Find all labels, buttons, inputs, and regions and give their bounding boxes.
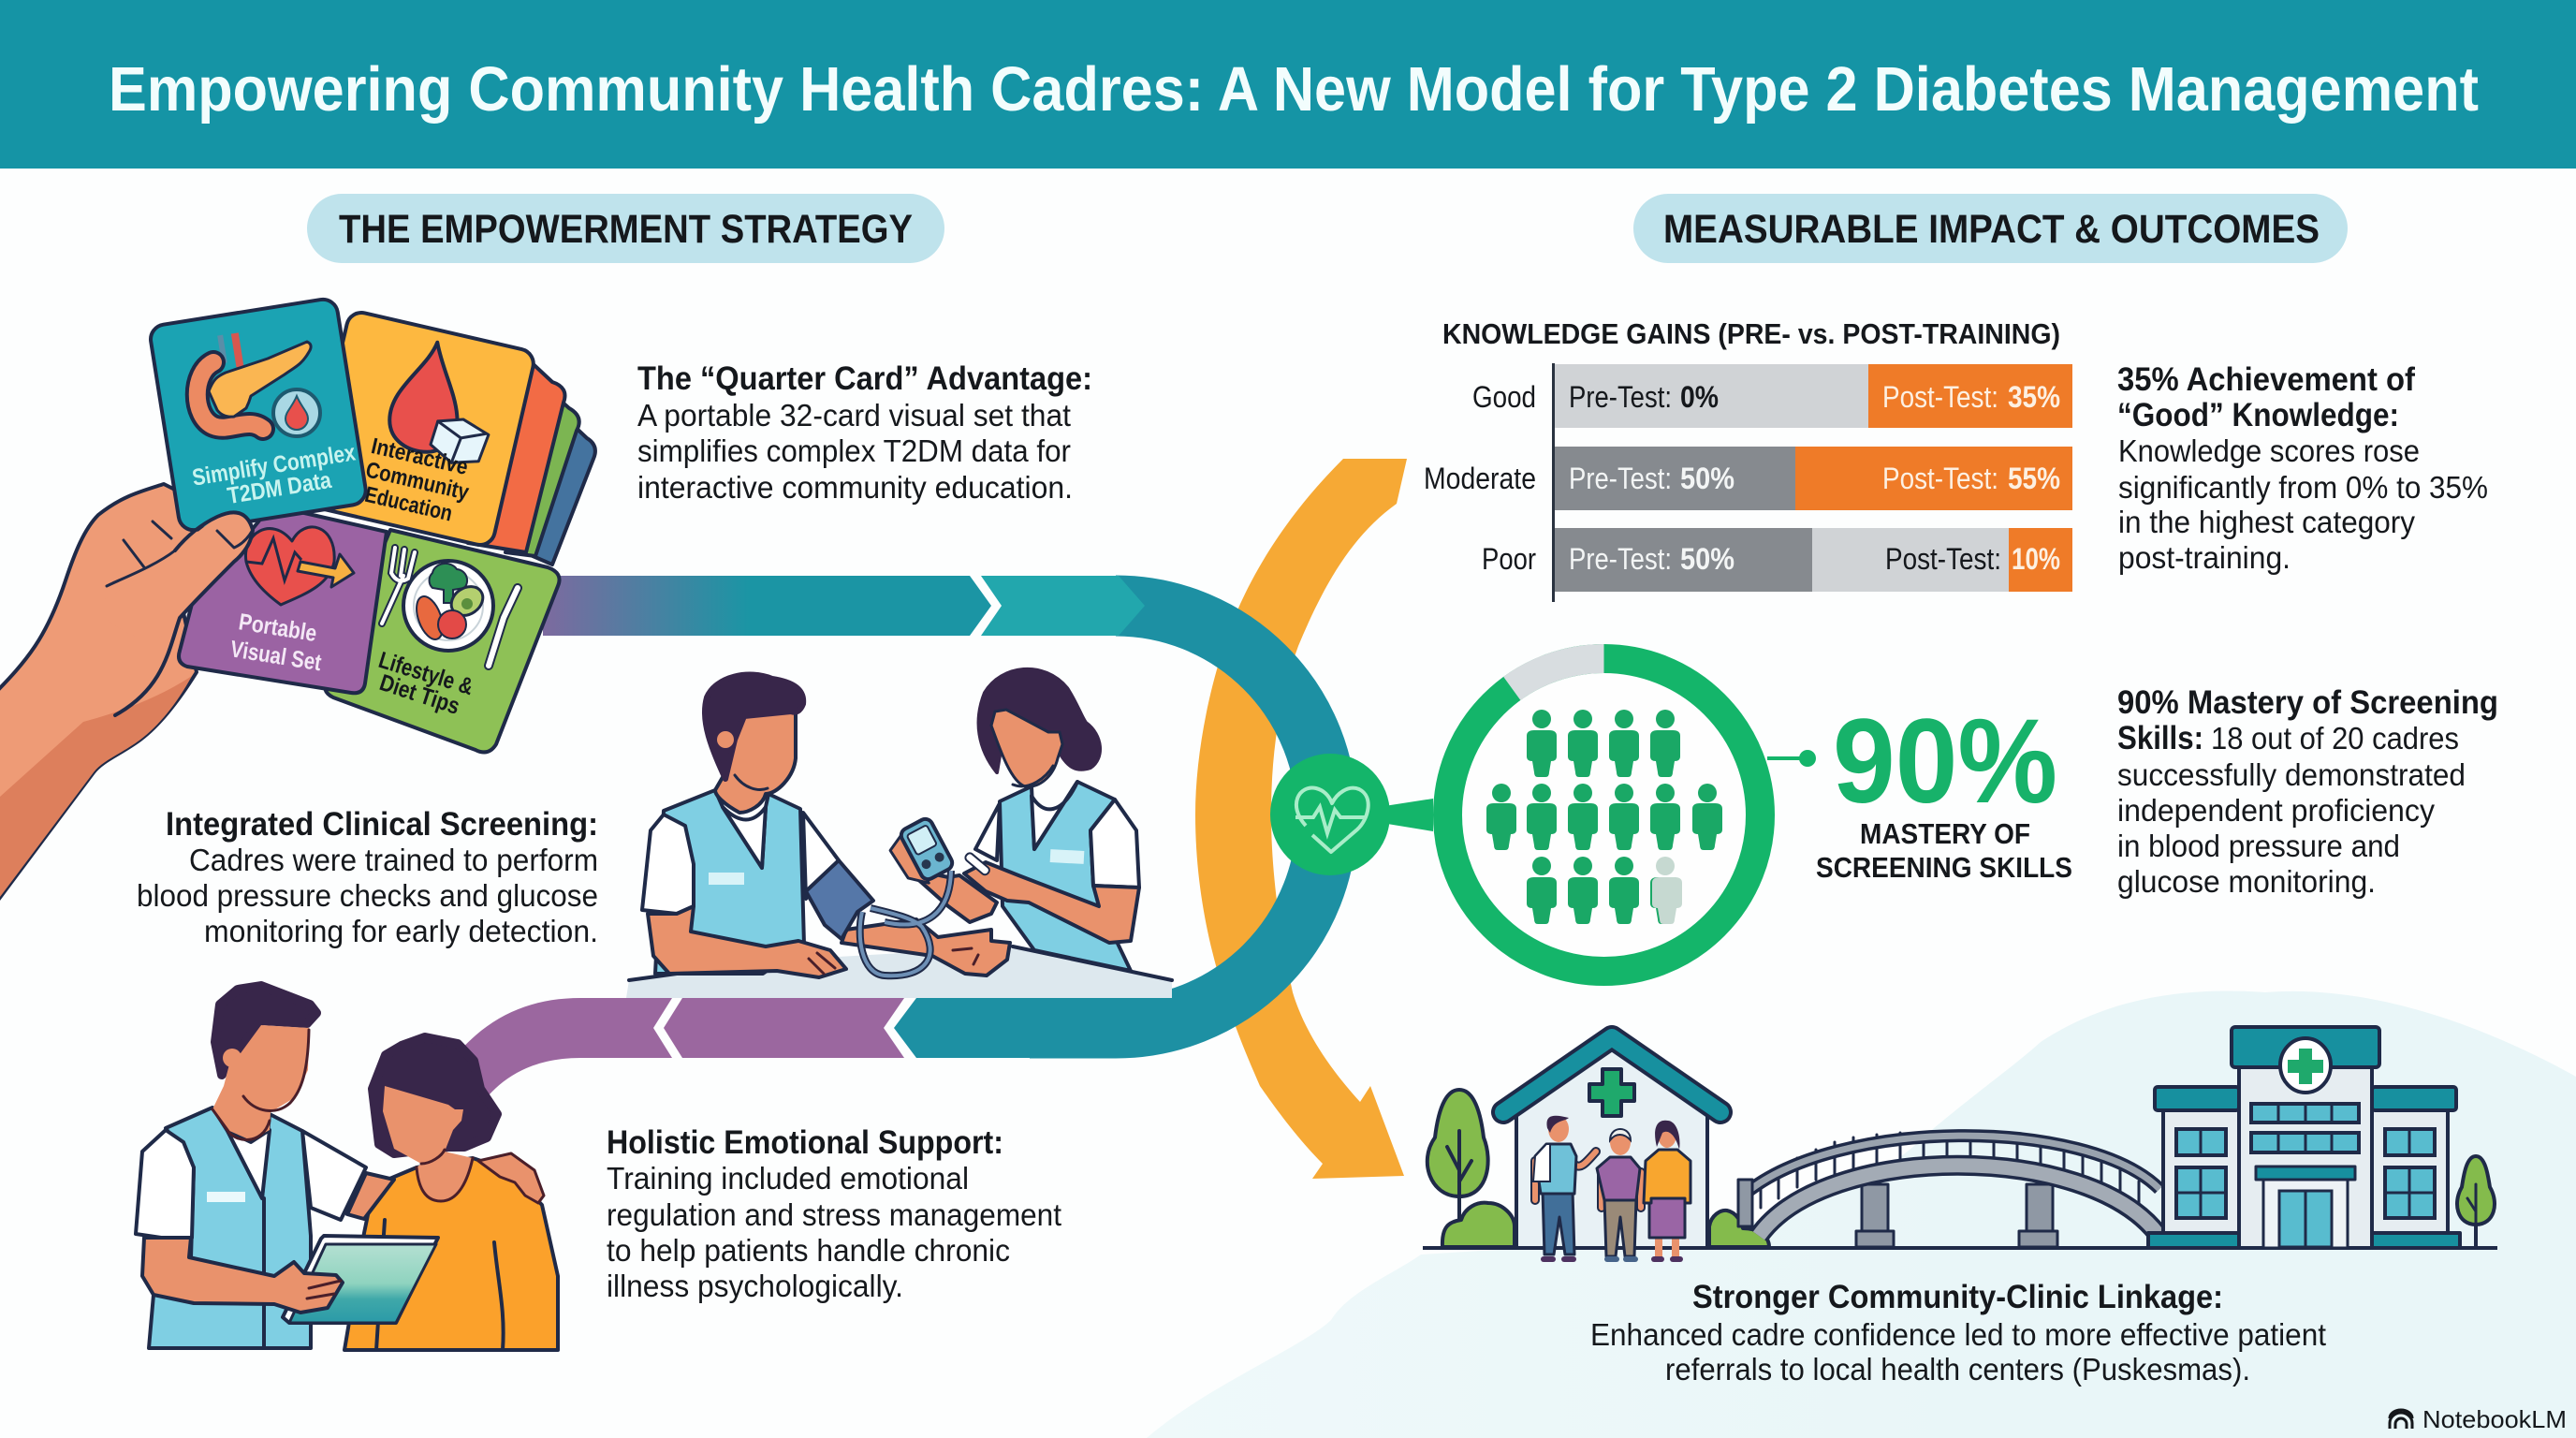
text block: quarter card advantage: simplifies complex T2DM data for bbox=[637, 433, 1071, 468]
people at clinic bbox=[1533, 1116, 1690, 1262]
text block: 90 percent mastery of screening skills: successfully demonstrated bbox=[2117, 757, 2466, 792]
bar: moderate bbox=[1424, 447, 2072, 510]
heading pill: measurable impact bbox=[1633, 194, 2348, 263]
right tree bbox=[2457, 1156, 2495, 1248]
tablet bbox=[283, 1236, 438, 1323]
text block: 35 percent achievement: “Good” Knowledge: bbox=[2117, 397, 2399, 433]
man bbox=[1533, 1116, 1596, 1262]
female cadre bbox=[905, 669, 1139, 971]
hand thumb bbox=[105, 512, 253, 715]
hospital emblem bbox=[2280, 1038, 2331, 1093]
stat: 90 percent mastery: 90% bbox=[1833, 695, 2057, 829]
hand holding quarter cards bbox=[0, 298, 595, 910]
text block: quarter card advantage: interactive community education. bbox=[637, 470, 1073, 505]
text block: 35 percent achievement bbox=[2117, 361, 2488, 575]
hand palm bbox=[0, 484, 243, 910]
glucose meter and tubing bbox=[860, 816, 991, 976]
text block: 90 percent mastery of screening skills: Skills: bbox=[2117, 720, 2203, 756]
bar: good: Pre-Test: bbox=[1569, 380, 1672, 414]
card: interactive community education: Interactive bbox=[369, 433, 470, 480]
text block: 90 percent mastery of screening skills: in blood pressure and bbox=[2117, 829, 2400, 863]
card: interactive community education bbox=[305, 310, 536, 548]
hospital entrance bbox=[2256, 1167, 2355, 1248]
heading pill: measurable impact: MEASURABLE IMPACT & OUTCOMES bbox=[1663, 207, 2320, 252]
bushes bbox=[1442, 1203, 1769, 1247]
bar: moderate: 50% bbox=[1680, 462, 1734, 495]
bar: good: Good bbox=[1472, 380, 1536, 414]
text block: holistic emotional support: Training included emotional bbox=[607, 1161, 969, 1196]
text block: 35 percent achievement: significantly from 0% to 35% bbox=[2118, 470, 2488, 505]
male cadre with tablet bbox=[136, 986, 438, 1348]
text block: quarter card advantage bbox=[637, 360, 1092, 505]
male cadre bbox=[642, 675, 1010, 977]
hospital windows bbox=[2176, 1104, 2435, 1218]
card: interactive community education: Education bbox=[362, 482, 455, 526]
text block: 35 percent achievement: in the highest category bbox=[2118, 505, 2415, 539]
ribbon: strategy flow bbox=[440, 576, 1326, 1095]
elder bbox=[1597, 1129, 1641, 1262]
hospital roofs bbox=[2148, 1027, 2460, 1248]
chart title: KNOWLEDGE GAINS (PRE- vs. POST-TRAINING) bbox=[1442, 317, 2060, 350]
text block: 35 percent achievement: Knowledge scores rose bbox=[2118, 433, 2420, 468]
text block: 90 percent mastery of screening skills: independent proficiency bbox=[2117, 793, 2435, 828]
text block: integrated clinical screening bbox=[137, 806, 598, 948]
heart icon hub bbox=[1270, 754, 1433, 875]
bridge piers bbox=[1856, 1184, 2057, 1247]
bar: moderate: 55% bbox=[2008, 462, 2060, 495]
text block: 90 percent mastery of screening skills: 18 out of 20 cadres bbox=[2211, 721, 2459, 756]
text block: integrated clinical screening: blood pressure checks and glucose bbox=[137, 878, 598, 913]
background wash bbox=[1147, 990, 2576, 1438]
orange arrow to community clinic linkage bbox=[1195, 459, 1407, 1179]
bar: good: Post-Test: bbox=[1882, 380, 1998, 414]
bar: poor: 10% bbox=[2012, 542, 2060, 576]
bar: good: 35% bbox=[2008, 380, 2060, 414]
hospital building bbox=[2148, 1027, 2460, 1248]
bar: good: 0% bbox=[1680, 380, 1719, 414]
text block: integrated clinical screening: Integrated Clinical Screening: bbox=[166, 806, 598, 843]
ground line bbox=[1423, 1246, 2497, 1250]
bar: poor: 50% bbox=[1680, 542, 1734, 576]
card: portable visual set: Portable bbox=[237, 609, 318, 647]
text block: holistic emotional support: to help patients handle chronic bbox=[607, 1233, 1010, 1268]
card: simplify complex T2DM data bbox=[149, 298, 368, 532]
text block: 90 percent mastery of screening skills bbox=[2117, 684, 2498, 899]
icon: notebook logo bbox=[2390, 1410, 2412, 1429]
card: lifestyle and diet tips: Lifestyle & bbox=[375, 647, 476, 700]
text block: holistic emotional support: illness psychologically. bbox=[607, 1269, 903, 1303]
bar: moderate: Post-Test: bbox=[1882, 462, 1998, 495]
text block: quarter card advantage: A portable 32-card visual set that bbox=[637, 398, 1071, 433]
patient bbox=[344, 1037, 558, 1350]
text block: quarter card advantage: The “Quarter Card” Advantage: bbox=[637, 360, 1092, 397]
card: lifestyle and diet tips bbox=[325, 530, 560, 752]
back cards bbox=[468, 356, 595, 565]
text block: 90 percent mastery of screening skills: 90% Mastery of Screening bbox=[2117, 684, 2498, 721]
illustration: cadres practicing blood pressure screening bbox=[626, 669, 1172, 998]
bar: moderate: Moderate bbox=[1424, 462, 1536, 495]
people pictogram bbox=[1486, 710, 1722, 924]
stat: 90 percent mastery bbox=[1816, 695, 2072, 884]
card: simplify complex T2DM data: Simplify Complex bbox=[190, 439, 358, 492]
text block: holistic emotional support bbox=[607, 1124, 1061, 1303]
community clinic building bbox=[1503, 1037, 1720, 1248]
bar: poor bbox=[1482, 528, 2072, 592]
text block: stronger community clinic linkage bbox=[1590, 1279, 2326, 1387]
illustration: community clinic to hospital bridge bbox=[1423, 1027, 2497, 1262]
woman bbox=[1644, 1121, 1690, 1262]
text block: 90 percent mastery of screening skills: glucose monitoring. bbox=[2117, 864, 2376, 899]
card: interactive community education: Community bbox=[363, 457, 472, 506]
NotebookLM watermark: NotebookLM bbox=[2422, 1405, 2567, 1433]
bar: moderate: Pre-Test: bbox=[1569, 462, 1672, 495]
arched bridge bbox=[1738, 1133, 2159, 1247]
card: portable visual set bbox=[179, 506, 387, 693]
stat: 90 percent mastery: MASTERY OF bbox=[1860, 817, 2030, 850]
text block: integrated clinical screening: Cadres were trained to perform bbox=[189, 843, 598, 877]
card: portable visual set: Visual Set bbox=[228, 636, 324, 676]
text block: stronger community clinic linkage: referrals to local health centers (Puskesmas). bbox=[1665, 1352, 2250, 1387]
90 percent ring with people pictogram bbox=[1447, 659, 1816, 972]
card: simplify complex T2DM data: T2DM Data bbox=[226, 467, 334, 509]
bar: poor: Pre-Test: bbox=[1569, 542, 1672, 576]
bar: poor: Post-Test: bbox=[1885, 542, 2001, 576]
illustration: cadre supporting patient with tablet bbox=[136, 986, 558, 1350]
text block: integrated clinical screening: monitoring for early detection. bbox=[204, 914, 598, 948]
text block: holistic emotional support: regulation and stress management bbox=[607, 1197, 1061, 1232]
bar: good bbox=[1472, 364, 2072, 428]
text block: stronger community clinic linkage: Stronger Community-Clinic Linkage: bbox=[1692, 1279, 2223, 1315]
left tree bbox=[1427, 1090, 1488, 1226]
text block: holistic emotional support: Holistic Emotional Support: bbox=[607, 1124, 1003, 1161]
table bbox=[626, 946, 1172, 998]
bar: poor: Poor bbox=[1482, 542, 1536, 576]
grey remainder segment bbox=[1512, 659, 1604, 688]
heading pill: the empowerment strategy: THE EMPOWERMENT STRATEGY bbox=[339, 207, 913, 252]
text block: 35 percent achievement: 35% Achievement of bbox=[2117, 361, 2415, 398]
card: lifestyle and diet tips: Diet Tips bbox=[376, 669, 462, 720]
connector to stat bbox=[1767, 750, 1816, 767]
stat: 90 percent mastery: SCREENING SKILLS bbox=[1816, 851, 2072, 884]
knowledge gains bar chart bbox=[1424, 317, 2072, 602]
text block: 35 percent achievement: post-training. bbox=[2118, 540, 2291, 575]
heading pill: the empowerment strategy bbox=[307, 194, 944, 263]
header banner bbox=[0, 0, 2576, 169]
text block: stronger community clinic linkage: Enhanced cadre confidence led to more effective patient bbox=[1590, 1317, 2326, 1352]
